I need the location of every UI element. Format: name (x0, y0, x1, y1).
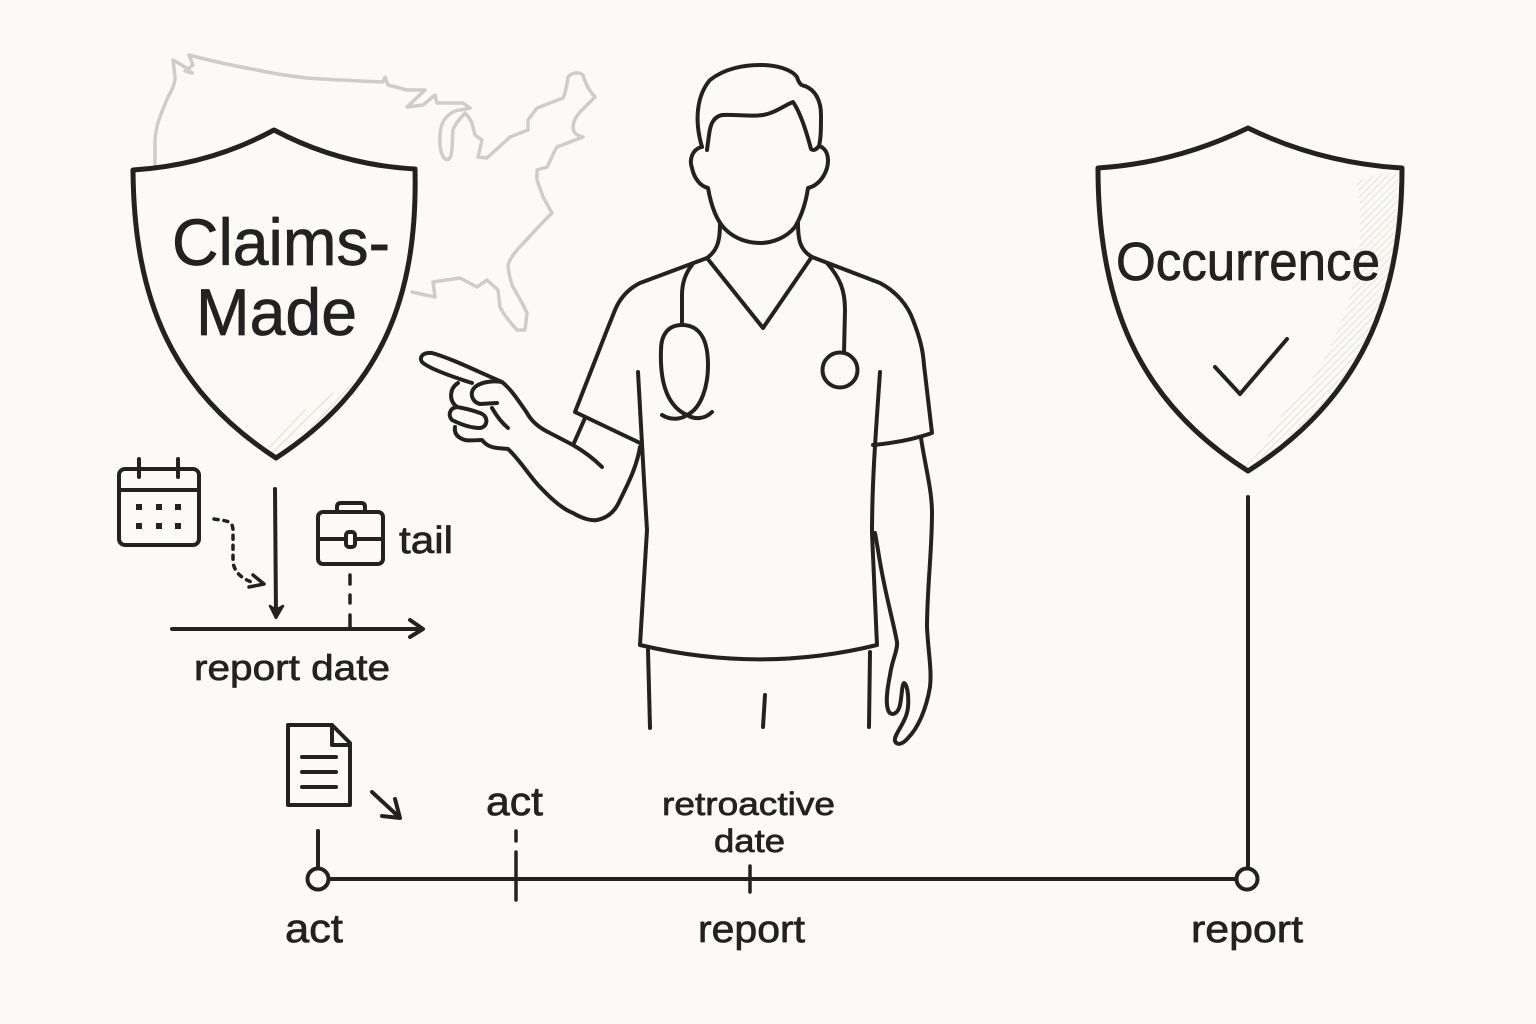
calendar body (119, 469, 199, 545)
right shoulder and sleeve (812, 257, 932, 445)
calendar date dots (136, 504, 181, 529)
shield label: Made (196, 275, 357, 349)
neck and collar (707, 223, 812, 328)
pointing arm and hand (421, 353, 640, 520)
main timeline (308, 497, 1258, 900)
end node (1236, 868, 1258, 890)
left shoulder and sleeve (575, 258, 707, 443)
shield label: Occurrence (1116, 232, 1380, 292)
dashed tail connector (348, 575, 352, 628)
Occurrence shield (1098, 128, 1402, 471)
retroactive date label: date (714, 823, 785, 859)
shield outline (133, 130, 415, 458)
arrow from shield to report date (275, 489, 276, 616)
hair (698, 65, 821, 150)
arrow head (270, 606, 283, 618)
report date label: report date (194, 647, 390, 688)
middle report label: report (698, 909, 805, 951)
small diagonal arrow (372, 792, 400, 818)
stethoscope chest piece (822, 352, 858, 388)
dashed arrow from calendar (214, 519, 264, 587)
shield hatch (270, 383, 353, 452)
upper act label: act (486, 780, 543, 824)
torso (638, 372, 880, 659)
trousers (648, 650, 870, 728)
retroactive date label: retroactive (662, 786, 835, 822)
timeline axis (328, 877, 1237, 881)
tail label: tail (399, 520, 453, 562)
occurrence connector (1246, 497, 1250, 869)
shield outline (1098, 128, 1402, 471)
icon: briefcase (318, 503, 383, 564)
report date axis arrow (172, 620, 423, 637)
retroactive date label (662, 786, 835, 859)
dashed act tick (514, 831, 518, 900)
retroactive date tick (748, 866, 752, 892)
shield hatch (1245, 172, 1398, 469)
icon: document (288, 725, 350, 805)
shield label: Claims- (172, 205, 390, 279)
right report label: report (1191, 909, 1303, 951)
Claims-Made shield (133, 130, 415, 458)
doctor figure (421, 65, 932, 744)
faint US map outline (155, 55, 595, 330)
icon: check mark (1215, 339, 1287, 394)
stethoscope tubing (661, 263, 845, 419)
stethoscope (661, 263, 858, 419)
calendar header and rings (119, 459, 199, 490)
hanging arm and hand (875, 438, 932, 744)
shield label (172, 205, 390, 349)
icon: calendar (119, 459, 199, 545)
start node (308, 868, 328, 890)
lower act label: act (285, 907, 343, 951)
face and ears (691, 146, 828, 243)
act marker stem (316, 831, 320, 869)
